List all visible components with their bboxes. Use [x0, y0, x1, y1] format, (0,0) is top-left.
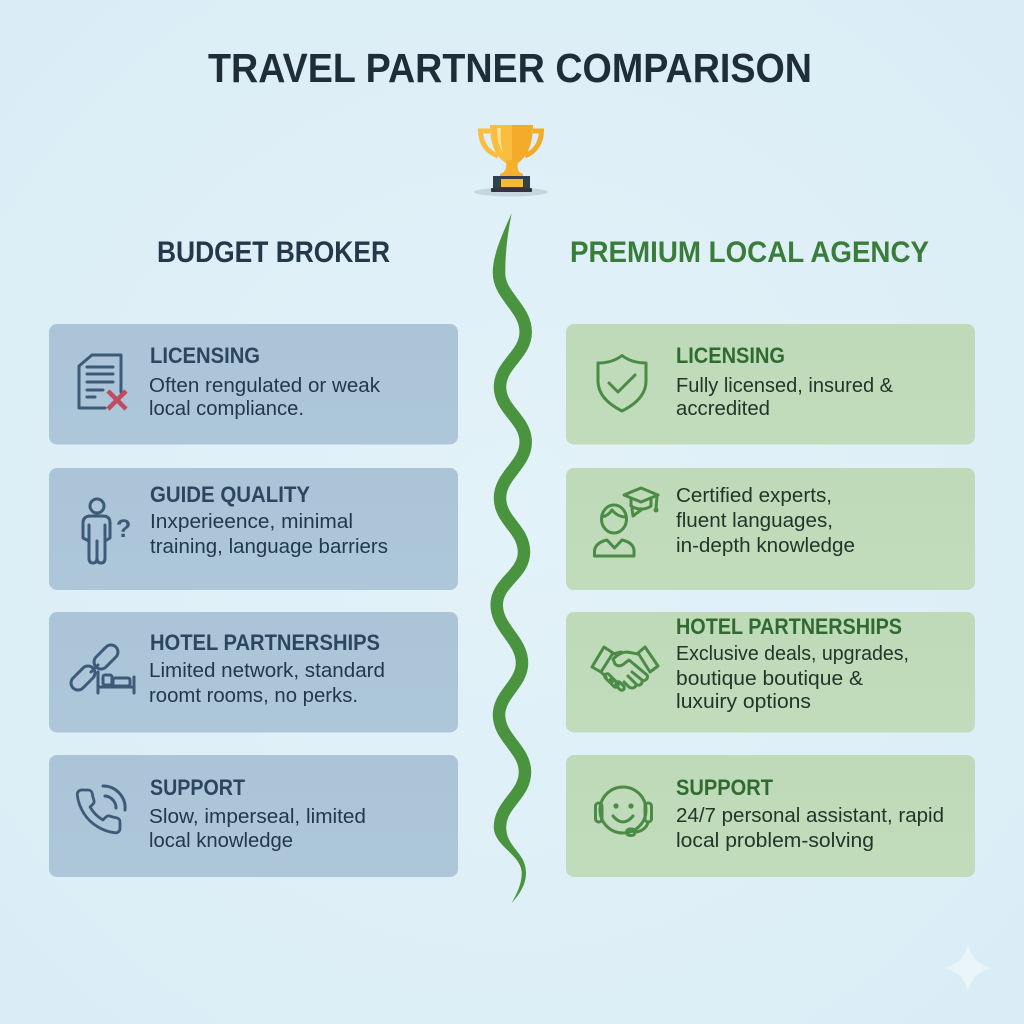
card text: SUPPORT: [676, 775, 774, 800]
card text: fluent languages,: [676, 509, 833, 532]
card text: local problem-solving: [676, 829, 874, 852]
card text: [149, 630, 385, 707]
panel: budget licensing: [49, 324, 458, 444]
icon: document with x: [79, 355, 126, 409]
card text: Slow, imperseal, limited: [149, 805, 366, 828]
panel: premium guide quality: [566, 468, 975, 590]
card text: [676, 614, 909, 713]
icon: phone with signal: [77, 786, 125, 833]
card text: Limited network, standard: [149, 659, 385, 682]
panel: budget support: [49, 755, 458, 877]
card text: HOTEL PARTNERSHIPS: [676, 614, 902, 639]
card text: GUIDE QUALITY: [150, 482, 310, 507]
left column heading: BUDGET BROKER: [157, 236, 390, 269]
card text: Often rengulated or weak: [149, 374, 381, 397]
card text: Inxperieence, minimal: [150, 510, 353, 533]
icon: smiling face with headset: [596, 787, 652, 836]
card text: LICENSING: [676, 343, 785, 368]
card text: Exclusive deals, upgrades,: [676, 642, 909, 665]
icon: person with question mark: [83, 499, 131, 563]
card text: [149, 343, 381, 420]
card text: [676, 484, 855, 557]
card text: local compliance.: [149, 397, 304, 420]
icon: person with question mark: ?: [116, 515, 131, 543]
panel: budget guide quality: [49, 468, 458, 590]
card text: [150, 482, 388, 558]
card text: LICENSING: [150, 343, 260, 368]
card text: Fully licensed, insured &: [676, 374, 893, 397]
card text: [676, 775, 944, 852]
card text: roomt rooms, no perks.: [149, 684, 358, 707]
card text: [149, 775, 366, 852]
icon: shield with check: [598, 356, 646, 411]
card text: local knowledge: [149, 829, 293, 852]
card text: HOTEL PARTNERSHIPS: [150, 630, 380, 655]
panel: premium licensing: [566, 324, 975, 444]
card text: 24/7 personal assistant, rapid: [676, 804, 944, 827]
title: TRAVEL PARTNER COMPARISON: [208, 45, 812, 91]
card text: SUPPORT: [150, 775, 245, 800]
right column heading: PREMIUM LOCAL AGENCY: [570, 236, 929, 269]
card text: boutique boutique &: [676, 667, 863, 690]
card text: Certified experts,: [676, 484, 832, 507]
card text: accredited: [676, 397, 770, 420]
icon: sparkle watermark: [944, 944, 992, 992]
panel: premium support: [566, 755, 975, 877]
icon: handshake: [592, 647, 658, 691]
icon: expert with graduation cap: [594, 488, 658, 556]
card text: in-depth knowledge: [676, 534, 855, 557]
wavy green divider: [493, 213, 526, 903]
card text: [676, 343, 893, 420]
panel: budget hotel partnerships: [49, 612, 458, 732]
card text: luxuiry options: [676, 690, 811, 713]
panel: premium hotel partnerships: [566, 612, 975, 732]
card text: training, language barriers: [150, 535, 388, 558]
icon: trophy: [474, 125, 548, 196]
icon: broken chain and bed: [68, 642, 134, 693]
